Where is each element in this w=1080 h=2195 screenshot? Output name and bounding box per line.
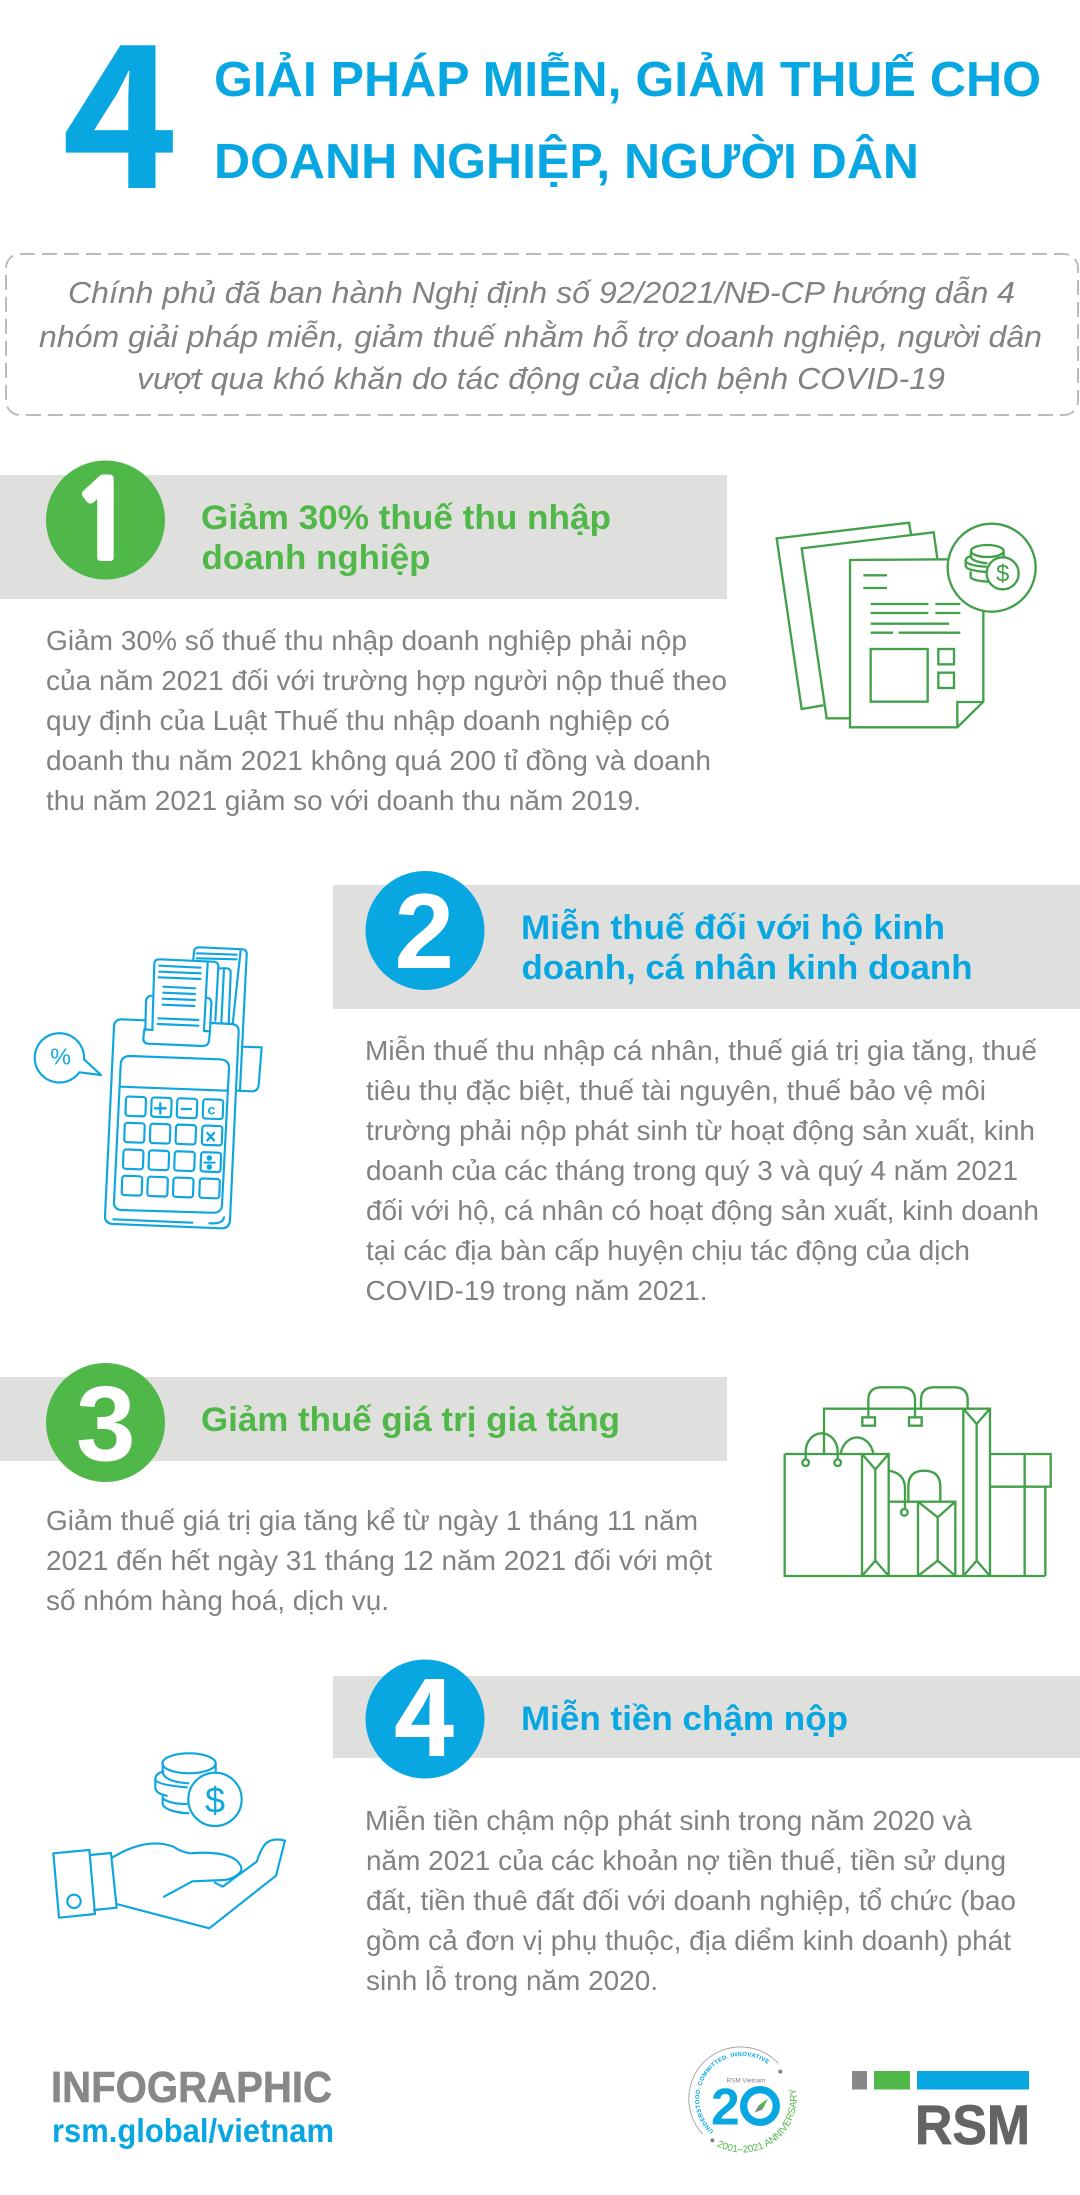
intro callout: dashed box xyxy=(6,254,1078,415)
icon: calculator with receipts xyxy=(35,947,262,1228)
footer: website: rsm.global/vietnam xyxy=(52,2112,334,2149)
logo: RSM Vietnam 20th anniversary badge: 2001–2021 ANNIVERSARY xyxy=(717,2089,797,2152)
body text 2: tiêu thụ đặc biệt, thuế tài nguyên, thuế bảo vệ môi xyxy=(366,1075,986,1106)
body text 3: 2021 đến hết ngày 31 tháng 12 năm 2021 đối với một xyxy=(46,1545,712,1576)
icon: shopping bags and gift box xyxy=(785,1387,1051,1576)
number badge 4: 4 xyxy=(393,1632,457,1787)
number badge 4 xyxy=(366,1632,484,1787)
body text 4: gồm cả đơn vị phụ thuộc, địa diểm kinh doanh) phát xyxy=(366,1925,1011,1956)
body text 2: trường phải nộp phát sinh từ hoạt động sản xuất, kinh xyxy=(366,1115,1035,1146)
logo: RSM xyxy=(852,2071,1030,2156)
heading 1 xyxy=(201,499,611,577)
number badge 3 xyxy=(46,1363,165,1484)
number badge 1 xyxy=(46,460,165,580)
logo: RSM Vietnam 20th anniversary badge: 2 xyxy=(711,2077,740,2135)
body text 3: số nhóm hàng hoá, dịch vụ. xyxy=(46,1585,389,1616)
title xyxy=(214,52,1041,189)
panel: section 1 xyxy=(0,460,1036,816)
logo: RSM Vietnam 20th anniversary badge: RSM Vietnam xyxy=(727,2077,765,2084)
intro callout: dashed box: nhóm giải pháp miễn, giảm thuế nhằm hỗ trợ doanh nghiệp, người dân xyxy=(39,319,1042,354)
body text 2: tại các địa bàn cấp huyện chịu tác động của dịch xyxy=(366,1235,970,1266)
body text 1: doanh thu năm 2021 không quá 200 tỉ đồng và doanh xyxy=(46,745,711,776)
logo: RSM Vietnam 20th anniversary badge xyxy=(688,2046,797,2152)
logo: RSM Vietnam 20th anniversary badge: UNDERSTOOD. COMMITTED. INNOVATIVE xyxy=(695,2052,770,2134)
intro callout: dashed box: Chính phủ đã ban hành Nghị định số 92/2021/NĐ-CP hướng dẫn 4 xyxy=(68,275,1015,310)
number badge 2 xyxy=(366,871,484,991)
panel: section 2 xyxy=(35,871,1080,1306)
heading 2: Miễn thuế đối với hộ kinh xyxy=(521,909,945,947)
heading 4: Miễn tiền chậm nộp xyxy=(521,1700,848,1738)
heading band 2 xyxy=(333,885,1080,1009)
body text 2: Miễn thuế thu nhập cá nhân, thuế giá trị gia tăng, thuế xyxy=(365,1035,1037,1066)
number badge 3: 3 xyxy=(76,1364,136,1484)
panel: section 3 xyxy=(0,1363,1051,1616)
body text 4: sinh lỗ trong năm 2020. xyxy=(366,1965,658,1996)
icon: hand receiving coins xyxy=(53,1753,285,1928)
body text 2: đối với hộ, cá nhân có hoạt động sản xuất, kinh doanh xyxy=(366,1195,1039,1226)
icon: calculator with receipts: % xyxy=(50,1044,71,1070)
body text 4 xyxy=(365,1805,1016,1996)
body text 1: thu năm 2021 giảm so với doanh thu năm 2019. xyxy=(46,785,641,816)
footer: infographic label: INFOGRAPHIC xyxy=(51,2063,332,2112)
body text 1: của năm 2021 đối với trường hợp người nộp thuế theo xyxy=(46,665,727,696)
body text 1: Giảm 30% số thuế thu nhập doanh nghiệp phải nộp xyxy=(46,625,687,656)
heading 3: Giảm thuế giá trị gia tăng xyxy=(201,1401,620,1439)
body text 4: đất, tiền thuê đất đối với doanh nghiệp, tổ chức (bao xyxy=(366,1885,1016,1916)
icon: hand receiving coins: $ xyxy=(205,1779,225,1820)
icon: tax documents with coins: $ xyxy=(996,561,1009,588)
body text 4: Miễn tiền chậm nộp phát sinh trong năm 2020 và xyxy=(365,1805,972,1836)
body text 2: doanh của các tháng trong quý 3 và quý 4 năm 2021 xyxy=(366,1155,1018,1186)
icon: tax documents with coins xyxy=(777,523,1036,727)
logo: RSM: RSM xyxy=(915,2093,1030,2156)
title: DOANH NGHIỆP, NGƯỜI DÂN xyxy=(214,134,919,189)
body text 4: năm 2021 của các khoản nợ tiền thuế, tiền sử dụng xyxy=(366,1845,1006,1876)
heading 2 xyxy=(521,909,972,987)
body text 2 xyxy=(365,1035,1039,1306)
panel: section 4 xyxy=(53,1632,1080,1996)
body text 1: quy định của Luật Thuế thu nhập doanh nghiệp có xyxy=(46,705,670,736)
title: GIẢI PHÁP MIỄN, GIẢM THUẾ CHO xyxy=(214,52,1041,107)
heading 2: doanh, cá nhân kinh doanh xyxy=(522,949,972,987)
heading 1: doanh nghiệp xyxy=(202,539,430,577)
number badge 1: 1 xyxy=(71,468,135,574)
body text 1 xyxy=(46,625,727,816)
icon: calculator with receipts: c xyxy=(207,1101,215,1117)
heading 1: Giảm 30% thuế thu nhập xyxy=(201,499,611,537)
heading band 3 xyxy=(0,1377,727,1461)
body text 2: COVID-19 trong năm 2021. xyxy=(366,1275,708,1306)
body text 3 xyxy=(46,1505,712,1616)
number badge 2: 2 xyxy=(394,871,454,991)
body text 3: Giảm thuế giá trị gia tăng kể từ ngày 1 tháng 11 năm xyxy=(46,1505,698,1536)
heading band 4 xyxy=(333,1676,1080,1758)
intro callout: dashed box: vượt qua khó khăn do tác động của dịch bệnh COVID-19 xyxy=(137,361,945,396)
heading band 1 xyxy=(0,475,727,599)
